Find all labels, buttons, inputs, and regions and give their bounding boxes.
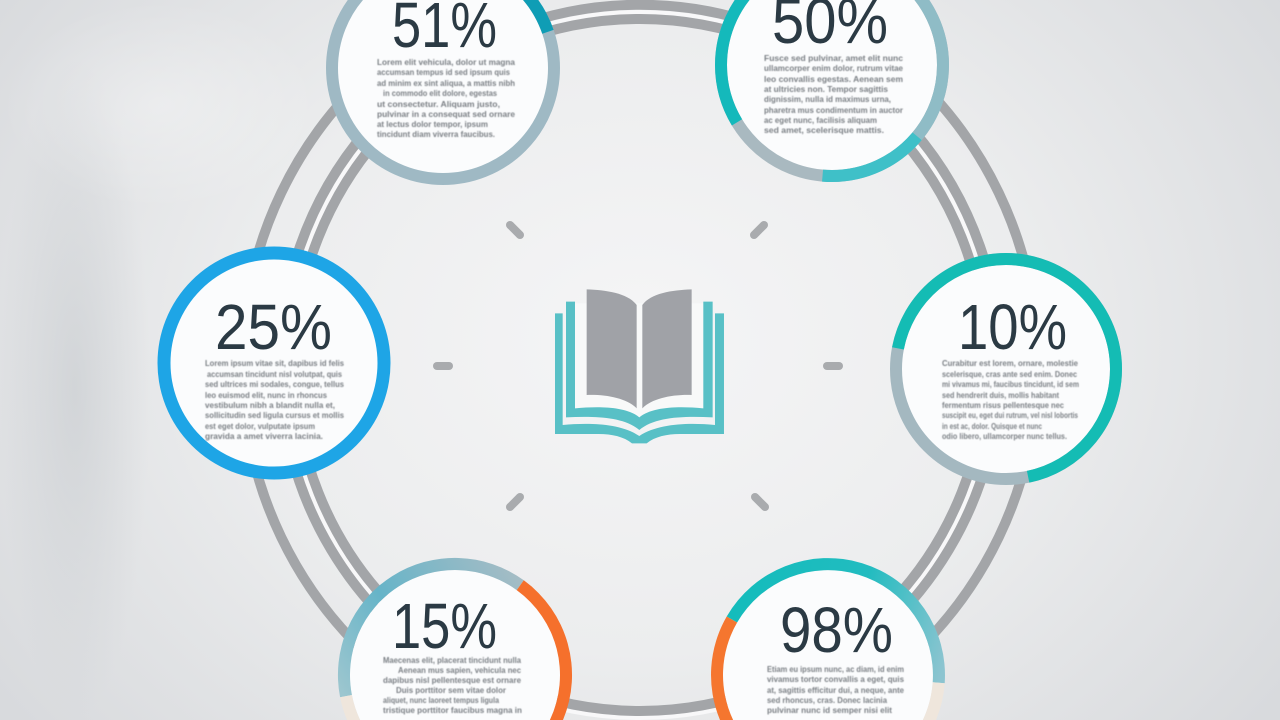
body text: pharetra mus condimentum in auctor <box>764 105 904 115</box>
body text: tincidunt diam viverra faucibus. <box>377 129 495 139</box>
body text: odio libero, ullamcorper nunc tellus. <box>942 431 1067 441</box>
body text <box>383 655 522 715</box>
body text: aliquet, nunc laoreet tempus ligula <box>383 695 499 705</box>
body text: Aenean mus sapien, vehicula nec <box>398 665 521 675</box>
body text: pulvinar in a consequat sed ornare <box>377 109 515 119</box>
icon: open book <box>555 289 724 443</box>
body text: Duis porttitor sem vitae dolor <box>396 685 507 695</box>
body text <box>205 358 344 441</box>
body text: dignissim, nulla id maximus urna, <box>764 94 891 104</box>
value: 10%: 10% <box>958 291 1067 363</box>
body text: Lorem ipsum vitae sit, dapibus id felis <box>205 358 344 368</box>
body text: at, sagittis efficitur dui, a neque, ante <box>767 685 904 695</box>
body text: leo convallis egestas. Aenean sem <box>764 74 903 84</box>
body text <box>764 53 904 135</box>
panel: 15% <box>338 558 572 720</box>
body text: accumsan tincidunt nisl volutpat, quis <box>207 369 342 379</box>
body text: scelerisque, cras ante sed enim. Donec <box>942 369 1077 379</box>
value: 15%: 15% <box>392 590 497 662</box>
body text: Lorem elit vehicula, dolor ut magna <box>377 57 515 67</box>
body text: at lectus dolor tempor, ipsum <box>377 119 488 129</box>
body text: sollicitudin sed ligula cursus et mollis <box>205 410 344 420</box>
body text: ad minim ex sint aliqua, a mattis nibh <box>377 78 515 88</box>
body text: sed amet, scelerisque mattis. <box>764 125 884 135</box>
body text: vivamus tortor convallis a eget, quis <box>767 674 904 684</box>
body text <box>767 664 904 715</box>
body text: accumsan tempus id sed ipsum quis <box>377 67 510 77</box>
body text: ut consectetur. Aliquam justo, <box>377 99 500 109</box>
body text: tristique porttitor faucibus magna in <box>383 705 522 715</box>
body text: sed hendrerit duis, mollis habitant <box>942 390 1059 400</box>
connecting rings <box>242 5 1038 718</box>
panel: 10% <box>896 259 1116 479</box>
radial tick marks <box>437 225 839 507</box>
body text: Etiam eu ipsum nunc, ac diam, id enim <box>767 664 904 674</box>
body text: at ultricies non. Tempor sagittis <box>764 84 888 94</box>
panel: 50% <box>721 0 943 176</box>
panel: 98% <box>711 558 945 720</box>
body text: fermentum risus pellentesque nec <box>942 400 1064 410</box>
value: 25%: 25% <box>215 291 332 363</box>
body text: sed ultrices mi sodales, congue, tellus <box>205 379 344 389</box>
body text: gravida a amet viverra lacinia. <box>205 431 323 441</box>
value: 98%: 98% <box>780 594 893 666</box>
body text: ac eget nunc, facilisis aliquam <box>764 115 877 125</box>
body text: est eget dolor, vulputate ipsum <box>205 421 315 431</box>
body text: vestibulum nibh a blandit nulla et, <box>205 400 335 410</box>
body text: sed rhoncus, cras. Donec lacinia <box>767 695 887 705</box>
body text: Maecenas elit, placerat tincidunt nulla <box>383 655 521 665</box>
panel: 51% <box>332 0 554 179</box>
body text: Fusce sed pulvinar, amet elit nunc <box>764 53 903 63</box>
body text: pulvinar nunc id semper nisi elit <box>767 705 892 715</box>
body text: leo euismod elit, nunc in rhoncus <box>205 390 327 400</box>
body text <box>377 57 515 139</box>
body text: suscipit eu, eget dui rutrum, vel nisl lobortis <box>942 410 1078 420</box>
body text: ullamcorper enim dolor, rutrum vitae <box>764 63 903 73</box>
body text <box>942 358 1079 441</box>
body text: mi vivamus mi, faucibus tincidunt, id sem <box>942 379 1079 389</box>
body text: in commodo elit dolore, egestas <box>383 88 497 98</box>
body text: Curabitur est lorem, ornare, molestie <box>942 358 1078 368</box>
body text: in est ac, dolor. Quisque et nunc <box>942 421 1042 431</box>
body text: dapibus nisl pellentesque est ornare <box>383 675 521 685</box>
panel: 25% <box>164 253 384 473</box>
